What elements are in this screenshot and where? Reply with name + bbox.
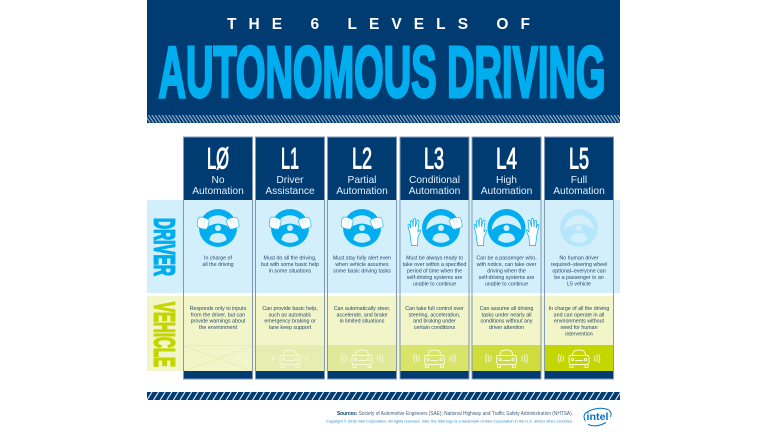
column: L2: Automation xyxy=(336,186,388,197)
L3 vehicle text: Can take full control over xyxy=(405,306,464,312)
column: L1: but with some basic help xyxy=(261,262,319,268)
L0 vehicle text: Responds only to inputs xyxy=(190,306,247,312)
L4 name: High xyxy=(496,175,517,186)
column: L5: environments without xyxy=(554,319,605,325)
L4 right open hand xyxy=(526,218,539,246)
column: L5 xyxy=(544,137,614,379)
L1 vehicle panel xyxy=(256,345,324,371)
column: L4: driving when the xyxy=(487,268,526,274)
L2 wheel icon xyxy=(340,209,384,247)
L3 heading: L3 xyxy=(424,142,444,176)
L3 open hand xyxy=(408,218,421,246)
vehicle label: VEHICLE xyxy=(148,302,180,367)
column: L3: period of time when the xyxy=(407,268,462,274)
L0 heading: LØ xyxy=(207,142,229,176)
L4 car icon xyxy=(486,350,527,368)
column: L5: Automation xyxy=(553,186,605,197)
column: L1: lane keep support xyxy=(269,325,312,331)
L5 vehicle panel xyxy=(544,345,614,371)
L1 vehicle text: Can provide basic help, xyxy=(262,306,318,312)
column: L4: tasks under nearly all xyxy=(481,312,532,318)
column: L2: in limited situations xyxy=(340,319,385,325)
column: L1: Assistance xyxy=(265,186,315,197)
column: L3: Automation xyxy=(409,186,460,197)
L3 wheel icon xyxy=(422,209,463,247)
column: L2: accelerate, and brake xyxy=(337,312,388,318)
column: L2 xyxy=(328,137,396,379)
L4 vehicle text: Can assume all driving xyxy=(480,306,533,312)
column: L0 xyxy=(184,137,252,379)
column: L3 xyxy=(400,137,469,379)
driver band xyxy=(147,200,620,293)
column: L3: take over within a specified xyxy=(403,262,466,268)
column: L0: all the driving xyxy=(202,262,234,268)
column: L2: some basic driving tasks xyxy=(333,268,391,274)
column: L5: and can operate in all xyxy=(554,312,604,318)
L5 driver text: No human driver xyxy=(559,256,599,262)
L2 car icon xyxy=(341,350,383,368)
L4 driver text: Can be a passenger who, xyxy=(476,256,537,262)
L2 driver text: Must stay fully alert even xyxy=(333,256,391,262)
column: L5: need for human xyxy=(560,325,598,331)
column: L0: from the driver, but can xyxy=(191,312,245,318)
L2 vehicle text: Can automatically steer, xyxy=(334,306,390,312)
column: L1: emergency braking or xyxy=(264,319,316,325)
L5 vehicle text: In charge of all the driving xyxy=(549,306,609,312)
column: L5: L5 vehicle xyxy=(567,281,591,287)
column: L4 xyxy=(472,137,541,379)
column: L0: Automation xyxy=(192,186,244,197)
column: L3: and braking under xyxy=(413,319,456,325)
L2 name: Partial xyxy=(348,175,376,186)
column: L5: required–steering wheel xyxy=(551,262,607,268)
intel logo: intel xyxy=(586,411,609,423)
L0 name: No xyxy=(211,175,225,186)
L5 heading: L5 xyxy=(569,142,589,176)
column: L4: unable to continue xyxy=(485,281,528,287)
L4 wheel icon xyxy=(488,209,526,247)
L5 car icon xyxy=(558,350,600,368)
L1 driver text: Must do all the driving, xyxy=(264,256,316,262)
L4 vehicle panel xyxy=(472,345,541,371)
title: the 6 levels of: THE 6 LEVELS OF xyxy=(227,16,530,33)
column: L5: optional–everyone can xyxy=(552,268,606,274)
footer stripe xyxy=(147,392,620,400)
column: L4: Automation xyxy=(481,186,532,197)
L0 driver text: In charge of xyxy=(204,256,233,262)
L1 car icon xyxy=(272,350,308,368)
copyright line: Copyright © 2018 Intel Corporation. All rights reserved. Intel, the Intel logo is a trademark of Intel Corporation in the U.S. and/or other countries. xyxy=(326,418,573,424)
column: L3: certain conditions xyxy=(414,325,455,331)
L3 car icon xyxy=(414,350,455,368)
driver label: DRIVER xyxy=(148,218,180,276)
column: L1 xyxy=(256,137,324,379)
L3 vehicle panel xyxy=(400,345,469,371)
column: L4: driver attention xyxy=(489,325,524,331)
column: L3: self-driving systems are xyxy=(407,275,462,281)
column: L5: intervention xyxy=(565,331,593,337)
L4 heading: L4 xyxy=(496,142,517,176)
column: L2: when vehicle assumes xyxy=(335,262,389,268)
sources line: Sources: Society of Automotive Engineers (SAE); National Highway and Traffic Safety Administration (NHTSA). xyxy=(337,411,573,417)
column: L1: such as automatic xyxy=(269,312,312,318)
L5 faded wheel icon xyxy=(560,209,598,247)
L4 left open hand xyxy=(474,218,487,246)
L2 heading: L2 xyxy=(352,142,372,176)
L1 name: Driver xyxy=(276,175,304,186)
header banner xyxy=(147,0,620,123)
column: L3: unable to continue xyxy=(413,281,456,287)
L1 wheel icon xyxy=(268,209,312,247)
column: L0: provide warnings about xyxy=(191,319,246,325)
column: L5: be a passenger in an xyxy=(554,275,604,281)
L0 wheel icon xyxy=(196,209,240,247)
intel logo xyxy=(584,408,611,426)
column: L4: self-driving systems are xyxy=(479,275,534,281)
L1 heading: L1 xyxy=(281,142,299,176)
L3 name: Conditional xyxy=(409,175,460,186)
L3 driver text: Must be always ready to xyxy=(406,256,463,262)
L0 no-car cross xyxy=(184,346,252,371)
L5 name: Full xyxy=(571,175,587,186)
column: L0: the environment xyxy=(199,325,238,331)
column: L4: with notice, can take over xyxy=(477,262,537,268)
L2 vehicle panel xyxy=(328,345,396,371)
column: L1: in some situations xyxy=(269,268,312,274)
column: L3: steering, acceleration, xyxy=(409,312,460,318)
column: L4: conditions without any xyxy=(480,319,533,325)
vehicle band xyxy=(147,296,613,371)
